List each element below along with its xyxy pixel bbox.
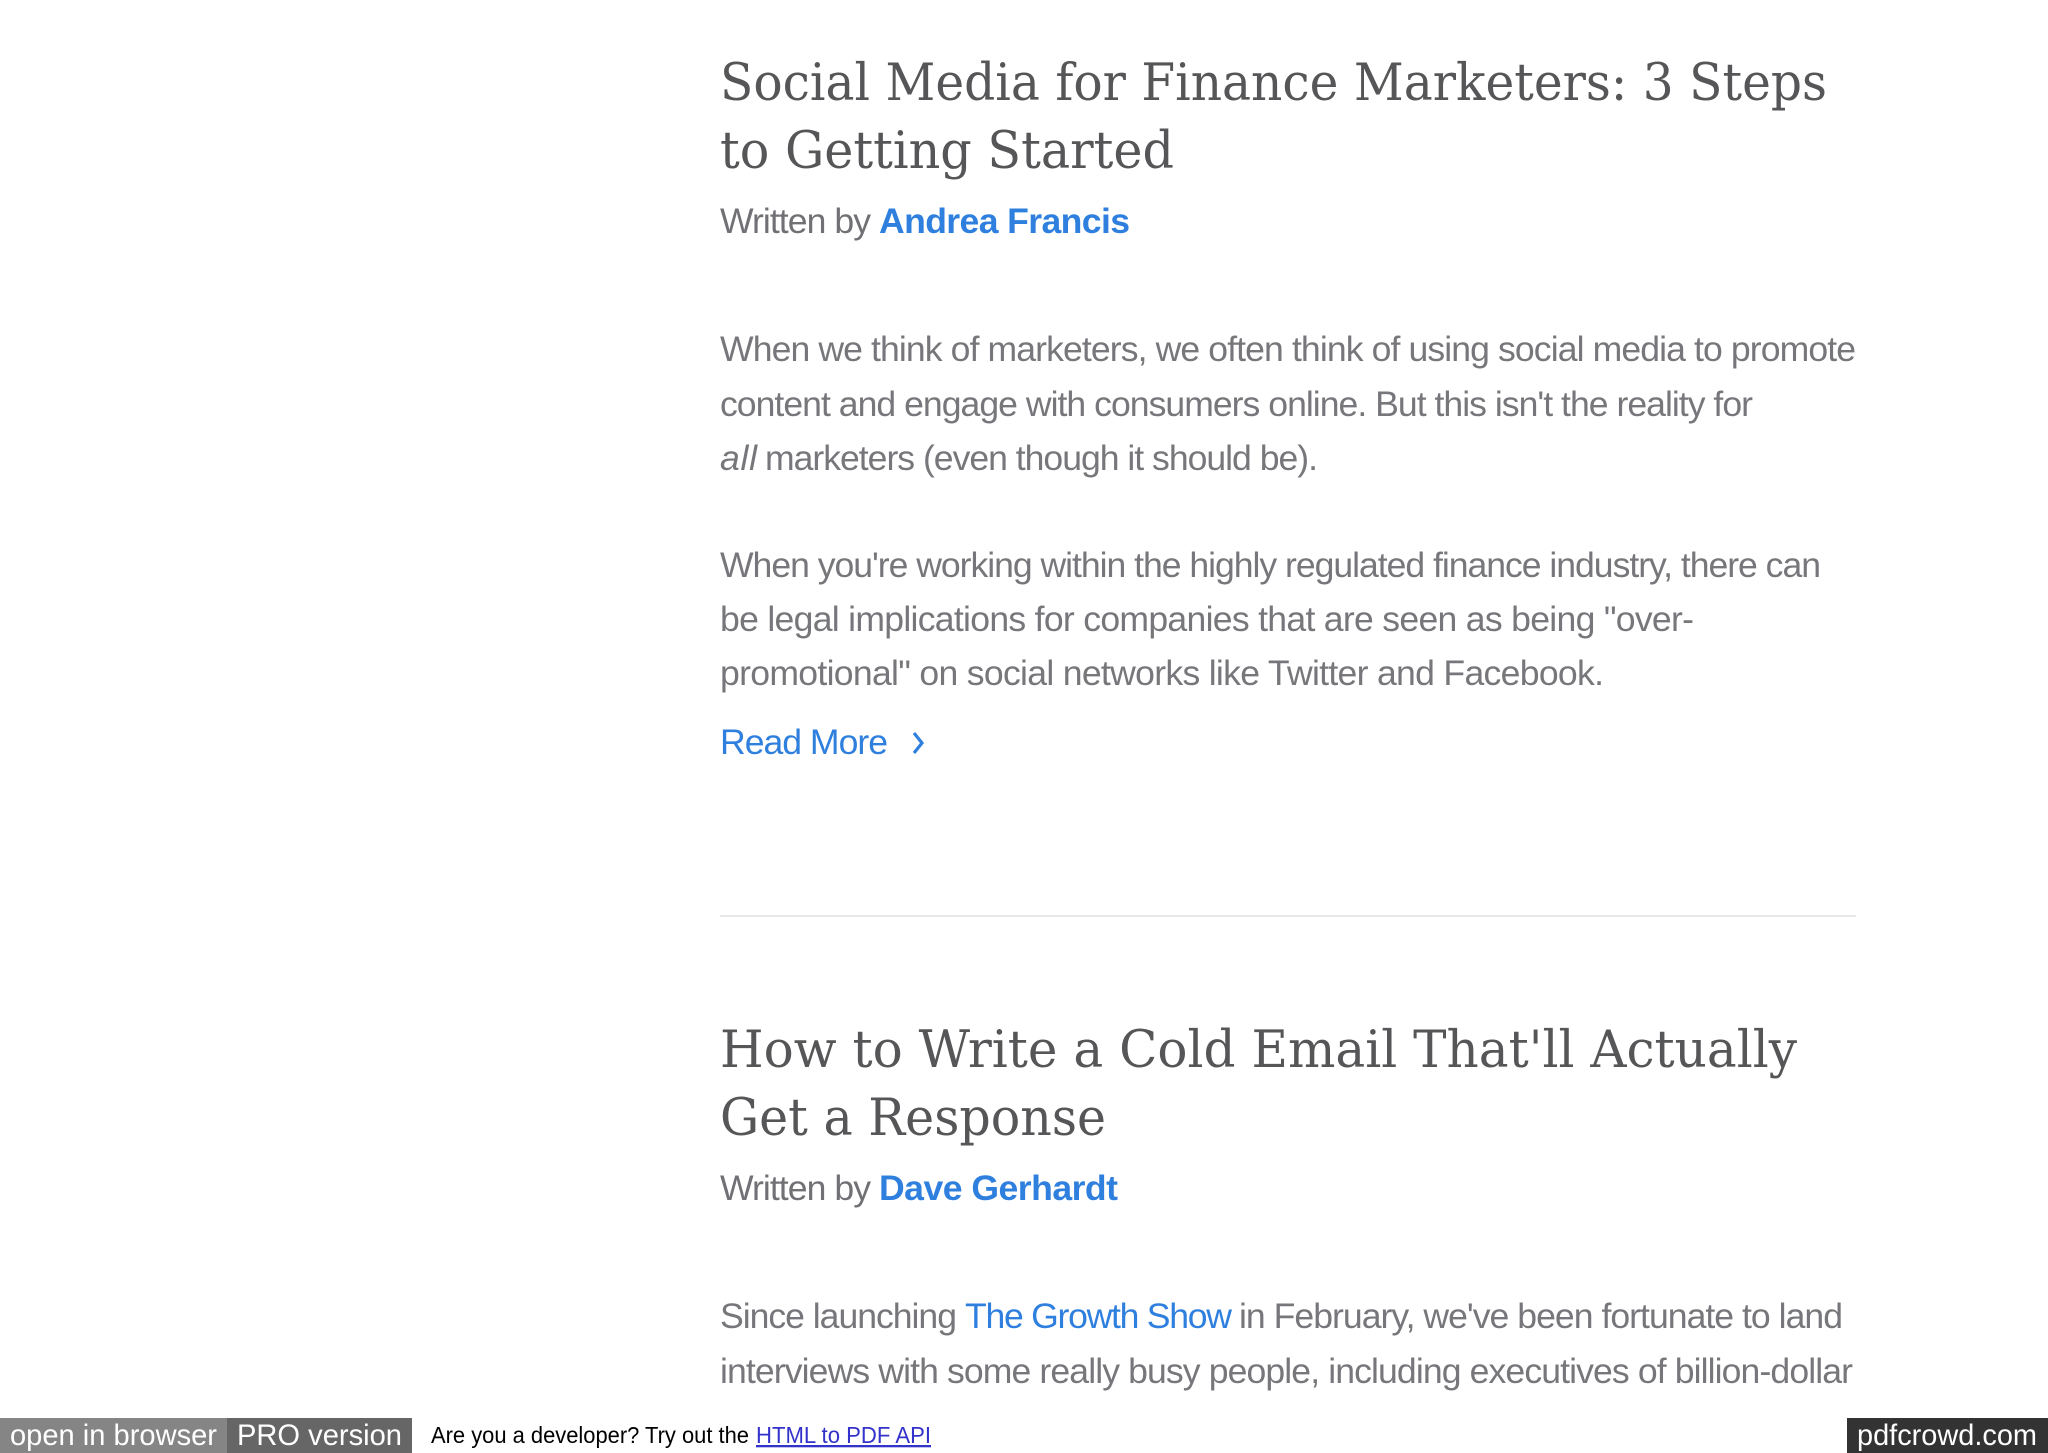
article 2 paragraph: The Growth Show: [965, 1296, 1232, 1336]
article 2 paragraph: interviews with some really busy people, including executives of billion-dollar: [720, 1351, 1853, 1391]
article 1 byline: [720, 201, 1130, 241]
button: open in browser: open in browser: [10, 1419, 217, 1452]
button: pdfcrowd.com: pdfcrowd.com: [1857, 1419, 2037, 1452]
article 1 title: to Getting Started: [720, 122, 1174, 181]
footer bar: [0, 1418, 2048, 1453]
developer message: Are you a developer? Try out the: [431, 1422, 749, 1448]
article 1 byline: Andrea Francis: [879, 201, 1130, 241]
article 2 title: [720, 1021, 1797, 1148]
button: PRO version: PRO version: [237, 1419, 402, 1452]
article 1 paragraph 1: all: [720, 438, 758, 478]
icon: chevron right: [914, 733, 922, 753]
developer message: HTML to PDF API: [756, 1422, 931, 1448]
article 1 paragraph 2: promotional" on social networks like Twitter and Facebook.: [720, 653, 1604, 693]
article 1: [720, 54, 1856, 762]
article 1 title: [720, 54, 1827, 181]
article 1 paragraph 1: [720, 329, 1856, 478]
article 1 paragraph 1: When we think of marketers, we often think of using social media to promote: [720, 329, 1856, 369]
article 1 paragraph 2: [720, 545, 1821, 693]
article 1 paragraph 1: content and engage with consumers online. But this isn't the reality for: [720, 384, 1753, 424]
article 2 paragraph: [720, 1296, 1853, 1391]
article 2 title: Get a Response: [720, 1089, 1106, 1148]
article 1 byline: Written by: [720, 201, 871, 241]
developer message: [431, 1422, 931, 1448]
article 2 title: How to Write a Cold Email That'll Actually: [720, 1021, 1797, 1080]
article 2: [720, 1021, 1853, 1391]
article 2 byline: [720, 1168, 1118, 1208]
article 1 paragraph 2: When you're working within the highly regulated finance industry, there can: [720, 545, 1821, 585]
article 1 paragraph 1: marketers (even though it should be).: [765, 438, 1318, 478]
article 2 byline: Dave Gerhardt: [879, 1168, 1118, 1208]
article 2 paragraph: Since launching: [720, 1296, 957, 1336]
read more link: Read More: [720, 722, 888, 762]
article 1 title: Social Media for Finance Marketers: 3 Steps: [720, 54, 1827, 113]
article 1 paragraph 2: be legal implications for companies that are seen as being "over-: [720, 599, 1694, 639]
article 2 paragraph: in February, we've been fortunate to land: [1239, 1296, 1843, 1336]
article 2 byline: Written by: [720, 1168, 871, 1208]
